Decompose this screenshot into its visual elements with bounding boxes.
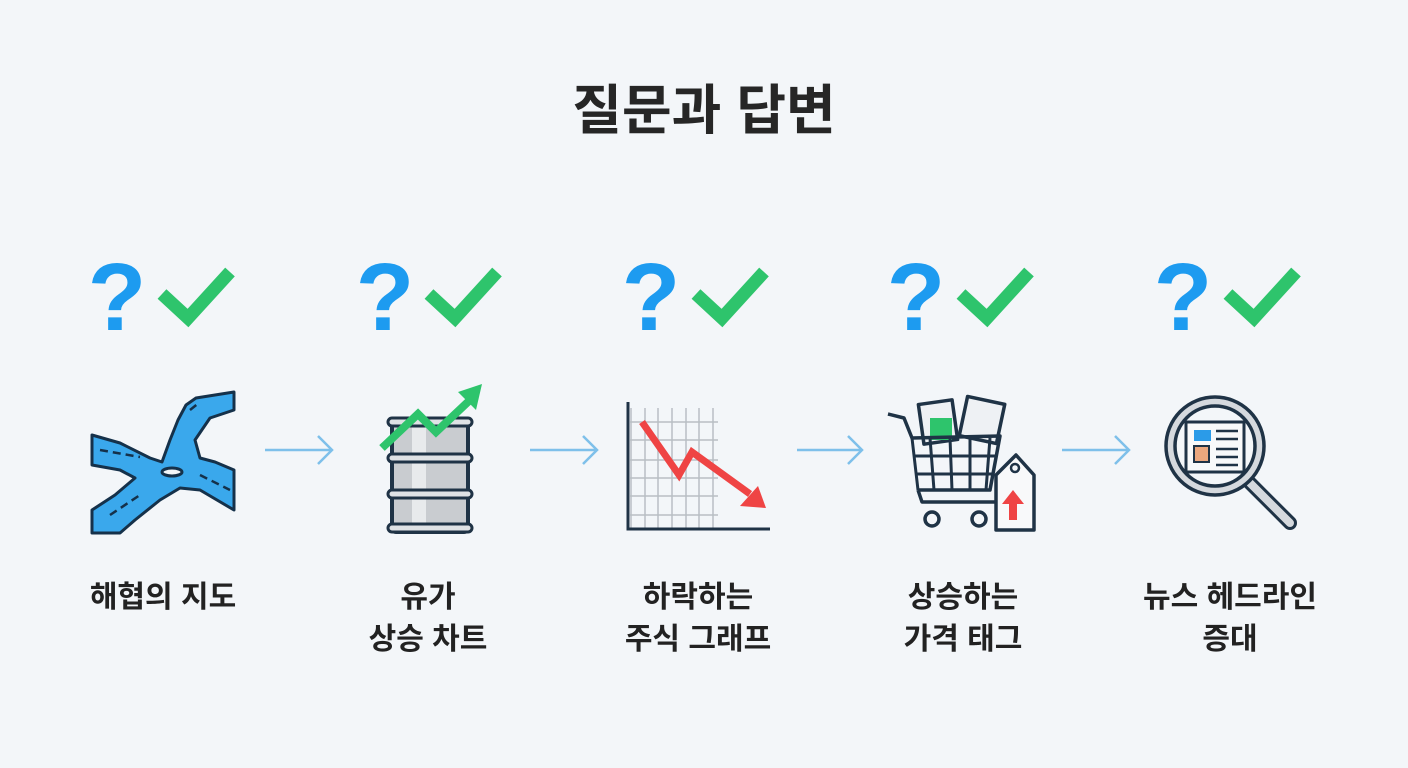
- icon: oil barrel with rising chart: [382, 384, 482, 532]
- label 2: 유가: [400, 581, 456, 614]
- arrow 3: [797, 436, 862, 464]
- icon: question and check 3: [622, 244, 764, 351]
- icon: cart with price tag: [888, 396, 1034, 530]
- label 2: 상승 차트: [369, 623, 487, 656]
- label 4: 상승하는: [908, 581, 1018, 614]
- icon: question and check 4: [887, 244, 1029, 351]
- icon: falling stock graph: [628, 402, 770, 529]
- icon: question and check 5: ?: [1154, 244, 1212, 351]
- icon: strait map: [92, 392, 234, 533]
- icon: question and check 1: ?: [88, 244, 146, 351]
- label 3: 주식 그래프: [625, 623, 771, 656]
- icon: magnifier with news: [1166, 397, 1290, 523]
- icon: question and check 2: [356, 244, 497, 351]
- arrow 4: [1062, 436, 1129, 464]
- label 5: 증대: [1202, 623, 1258, 656]
- arrow 1: [265, 436, 332, 464]
- label 5: 뉴스 헤드라인: [1143, 581, 1317, 614]
- icon: question and check 2: ?: [356, 244, 414, 351]
- icon: question and check 5: [1154, 244, 1296, 351]
- arrow 2: [530, 436, 597, 464]
- icon: question and check 4: ?: [887, 244, 945, 351]
- label 4: 가격 태그: [904, 623, 1022, 656]
- icon: question and check 3: ?: [622, 244, 680, 351]
- label 3: 하락하는: [643, 581, 753, 614]
- title: 질문과 답변: [572, 81, 836, 141]
- icon: question and check 1: [88, 244, 230, 351]
- label 1: 해협의 지도: [90, 581, 236, 614]
